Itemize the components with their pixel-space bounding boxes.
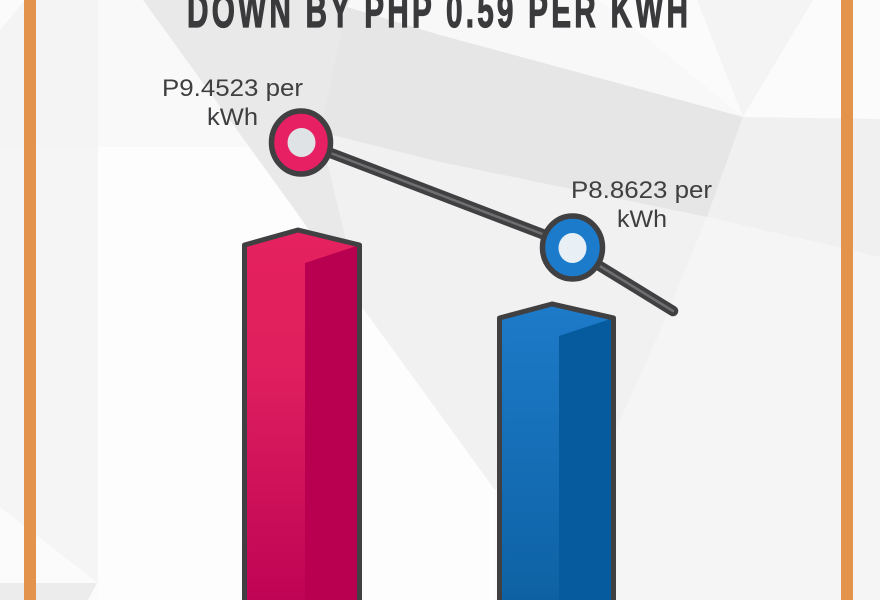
- marker: blue point: [542, 216, 602, 279]
- label: first value: kWh: [207, 104, 258, 131]
- left orange border: [24, 0, 36, 600]
- label: second value: P8.8623 per: [571, 177, 712, 204]
- bar: red: [244, 230, 360, 600]
- label: first value: P9.4523 per: [162, 75, 303, 102]
- bar: blue: [500, 304, 614, 600]
- label: second value: [571, 177, 712, 233]
- label: first value: [162, 75, 303, 131]
- label: second value: kWh: [617, 206, 667, 233]
- marker: red point: [272, 111, 330, 174]
- trend line: [328, 152, 673, 311]
- right orange border: [841, 0, 853, 600]
